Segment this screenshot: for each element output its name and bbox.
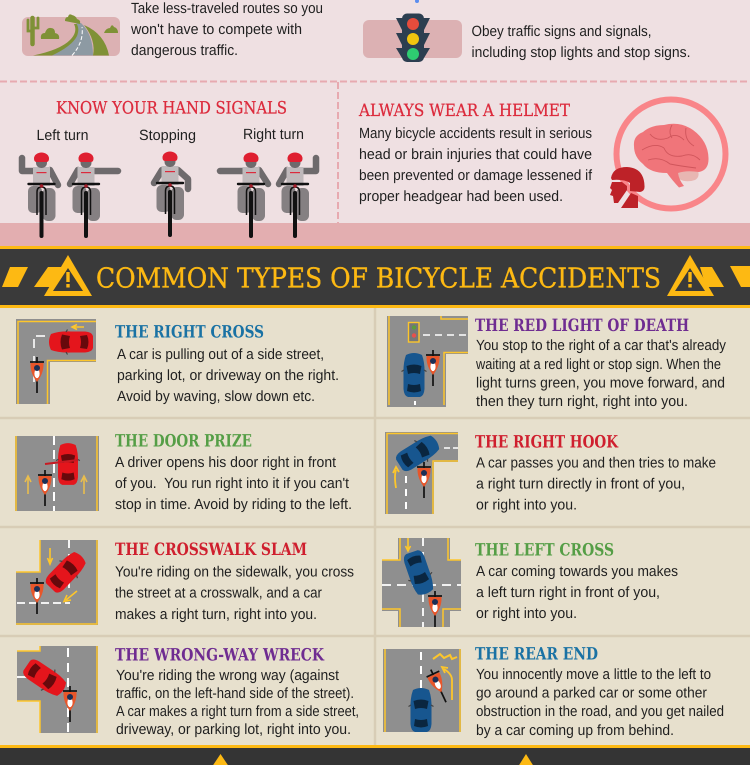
diagram: wrong-way wreck [17,646,98,733]
icon: rider right turn arm out [220,152,268,236]
description [115,455,352,513]
description: You're riding on the sidewalk, you cross [115,564,354,580]
description: by a car coming up from behind. [476,723,674,739]
icon: rider left turn arm raised [22,152,58,236]
icon: cropped warning triangle right [518,754,534,765]
card: the left cross [382,538,678,627]
text: less-traveled routes: Take less-traveled routes so you [131,1,323,17]
description: A car makes a right turn from a side street, [116,704,359,720]
icon: right warning triangle [667,255,714,296]
heading: always wear a helmet: ALWAYS WEAR A HELMET [358,101,571,121]
text: helmet advice: been prevented or damage lessened if [359,168,593,184]
description: then they turn right, right into you. [476,394,688,410]
panel: hand signals [22,98,316,236]
heading: THE RED LIGHT OF DEATH [475,316,689,336]
icon: rider left turn arm out [70,152,118,236]
description: a right turn directly in front of you, [476,476,685,492]
description: parking lot, or driveway on the right. [117,368,339,384]
diagram: left cross [382,538,461,627]
description: or right into you. [476,498,577,514]
description: makes a right turn, right into you. [115,607,317,623]
tip: obey traffic signs [363,0,690,62]
description [116,668,359,738]
text: obey signs: Obey traffic signs and signals, [472,24,652,40]
heading: THE CROSSWALK SLAM [115,540,307,560]
icon: helmeted head [610,167,645,208]
icon: winding road [22,14,120,56]
text: obey signs: including stop lights and stop signs. [472,45,690,61]
label: right turn: Right turn [243,127,304,143]
card: the rear end [383,644,724,739]
yellow rule above header [0,246,750,249]
card: the door prize [15,432,352,513]
icon: left warning triangle [44,255,92,296]
diagram: red light of death [387,316,468,407]
icon: right warning stripes [700,266,750,287]
description [476,564,678,622]
icon: rider right turn arm raised [279,152,316,236]
diagram: door prize [15,436,99,511]
description: the street at a crosswalk, and a car [115,586,322,602]
text: helmet advice [359,126,593,205]
description: of you. You run right into it if you can't [115,476,349,492]
icon: brain in circle [616,100,726,208]
description: a left turn right in front of you, [476,585,660,601]
icon: traffic light [363,0,462,62]
card: the wrong-way wreck [17,646,359,738]
text: helmet advice: Many bicycle accidents result in serious [359,126,592,142]
description: light turns green, you move forward, and [476,376,725,392]
card: the right cross [16,319,339,405]
tip: take less-traveled routes [22,1,323,59]
description [476,667,724,739]
diagram: crosswalk slam [16,540,98,625]
text: obey signs [472,24,690,61]
description [476,456,716,514]
description: traffic, on the left-hand side of the street). [116,686,354,702]
pink road band [0,223,750,246]
icon: cropped warning triangle left [212,754,228,765]
title: COMMON TYPES OF BICYCLE ACCIDENTS [96,262,661,294]
bottom dark band [0,745,750,765]
heading: THE WRONG-WAY WRECK [115,646,325,666]
description [117,347,339,405]
panel: always wear a helmet [358,100,726,208]
description [475,338,727,410]
diagram: right hook [385,431,458,514]
text: helmet advice: head or brain injuries that could have [359,147,592,163]
description: obstruction in the road, and you get nailed [476,704,724,720]
text: less-traveled routes [130,1,323,59]
description: or right into you. [476,606,577,622]
icon: left warning stripes [2,267,66,287]
card: the right hook [385,431,716,514]
card: the red light of death [387,316,727,410]
heading: THE RIGHT HOOK [475,432,619,452]
text: less-traveled routes: won't have to compete with [130,22,302,38]
description: You stop to the right of a car that's already [476,338,727,354]
diagram: right cross [16,319,96,404]
text: less-traveled routes: dangerous traffic. [131,43,238,59]
description: A car coming towards you makes [476,564,678,580]
cream background of accident cards [0,308,750,745]
description: go around a parked car or some other [476,686,707,702]
description: driveway, or parking lot, right into you. [116,722,351,738]
description: A driver opens his door right in front [115,455,336,471]
description [115,564,354,623]
description: You're riding the wrong way (against [116,668,339,684]
icon: rider stopping [154,152,188,235]
card: the crosswalk slam [16,540,354,625]
description: A car passes you and then tries to make [476,456,716,472]
heading: THE RIGHT CROSS [115,322,264,342]
diagram: rear end [383,649,461,732]
heading: THE DOOR PRIZE [115,432,252,452]
heading: THE REAR END [475,644,598,664]
text: helmet advice: proper headgear had been used. [359,189,563,205]
header band: common types of bicycle accidents [0,249,750,308]
description: stop in time. Avoid by riding to the left. [115,497,352,513]
heading: THE LEFT CROSS [475,540,614,560]
description: A car is pulling out of a side street, [117,347,324,363]
heading: know your hand signals: KNOW YOUR HAND SIGNALS [56,98,287,118]
label: stopping: Stopping [139,128,196,144]
label: left turn: Left turn [36,128,88,144]
description: Avoid by waving, slow down etc. [117,389,315,405]
description: You innocently move a little to the left to [476,667,711,683]
